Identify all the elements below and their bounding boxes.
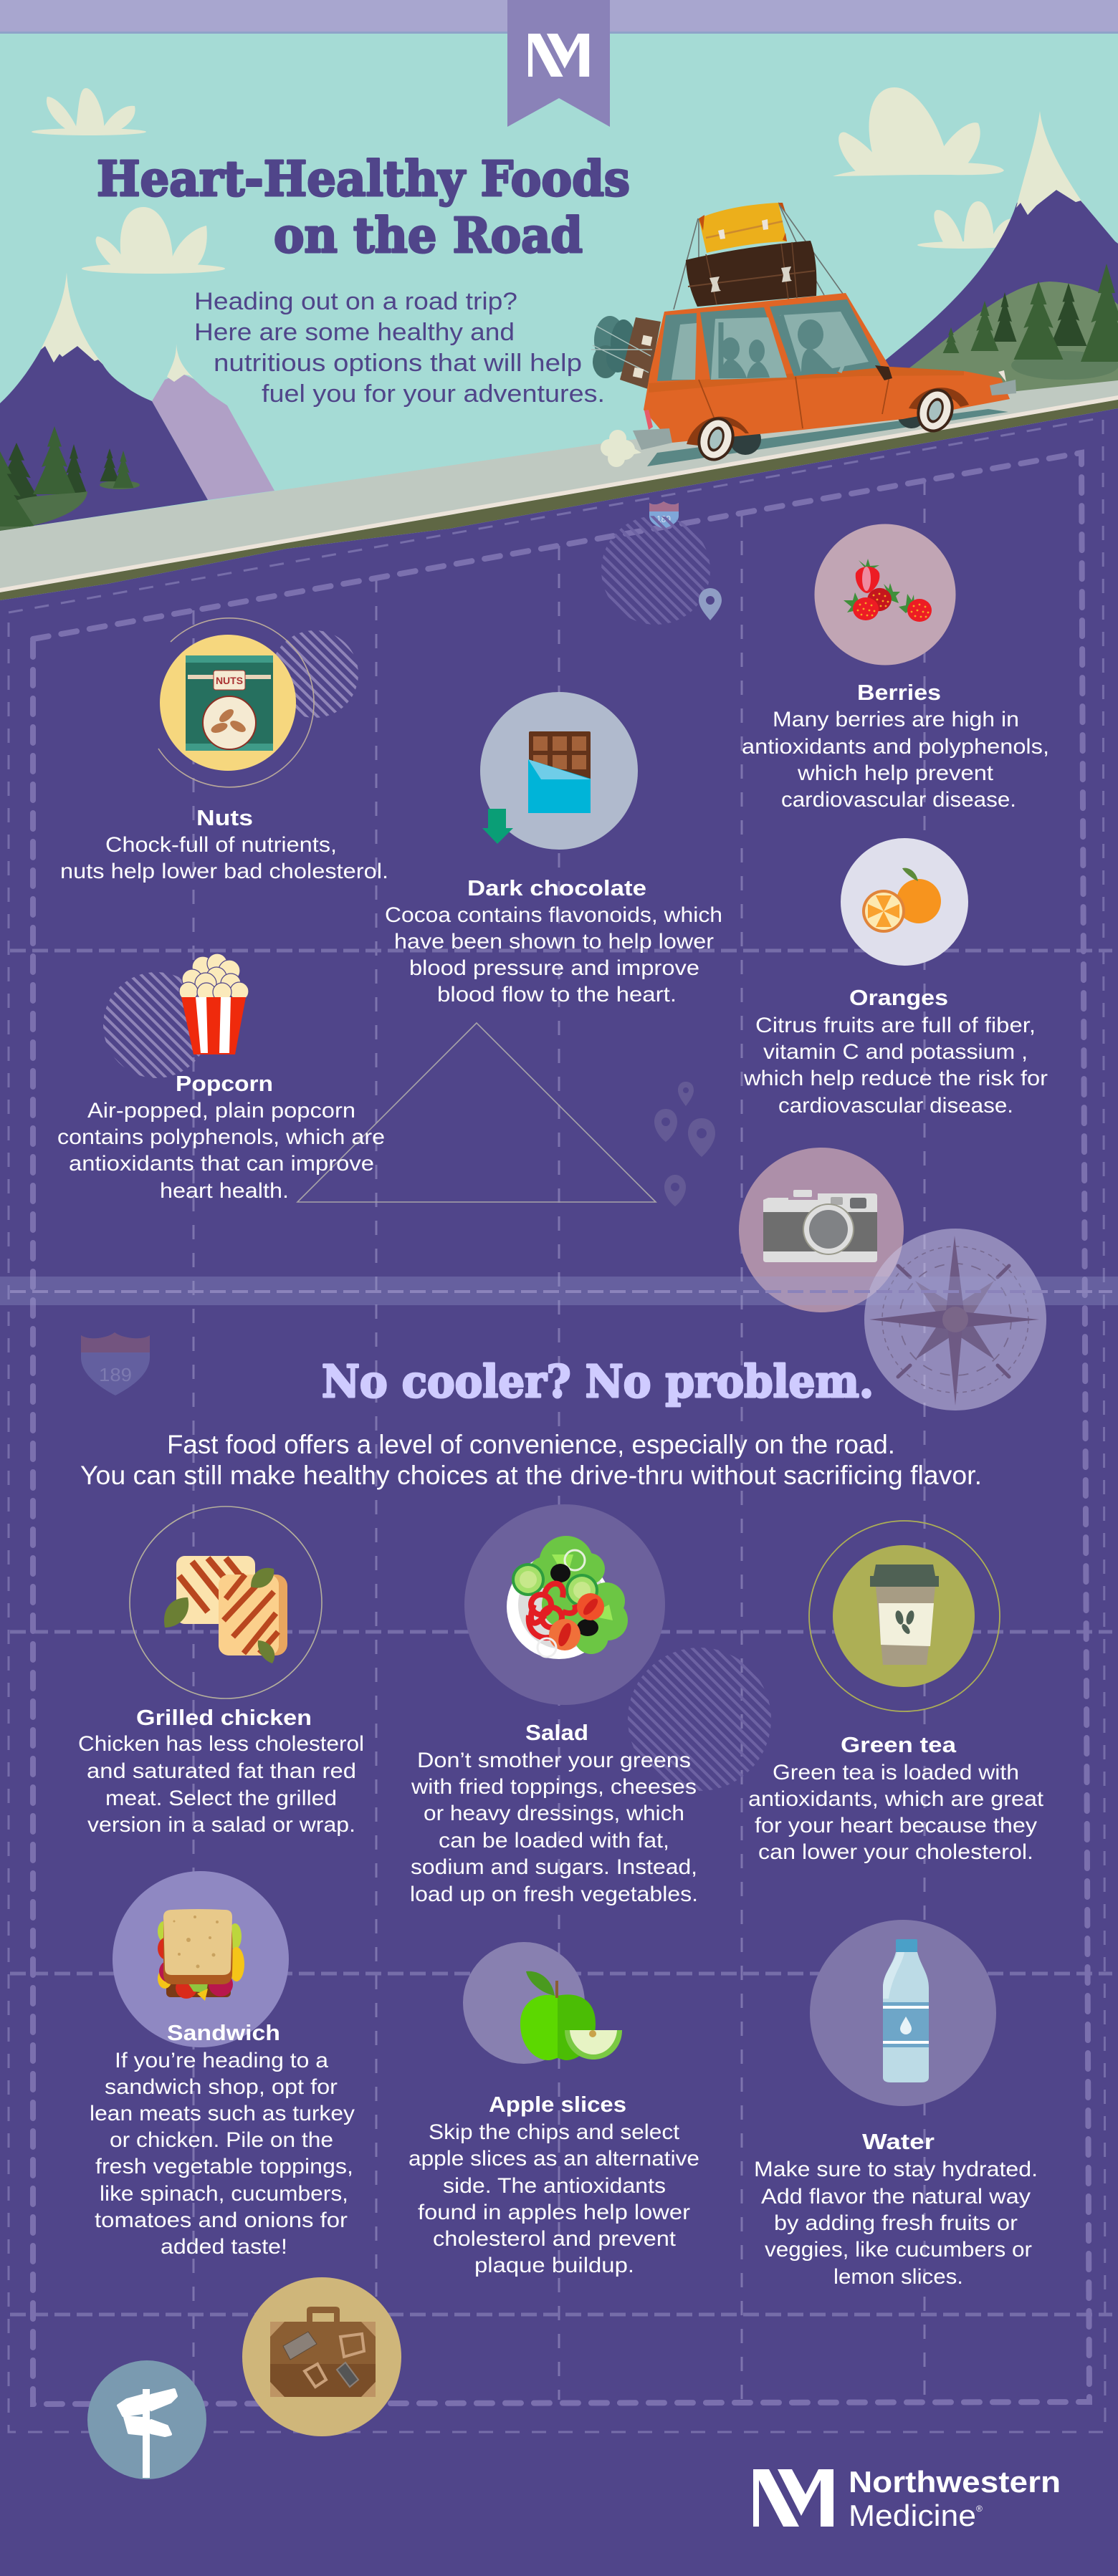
top band — [0, 0, 1118, 33]
body text: blood pressure and improve — [409, 956, 699, 980]
body text: sandwich shop, opt for — [105, 2075, 338, 2099]
heading: Water — [862, 2129, 935, 2154]
icon: wheel arches — [687, 388, 969, 446]
body text — [408, 2120, 699, 2277]
heading: Nuts — [196, 805, 253, 830]
icon: nuts bag — [186, 655, 273, 751]
icon: interstate sign top — [649, 501, 679, 529]
icon: salad plate — [507, 1536, 628, 1659]
intro text — [194, 288, 605, 408]
icon: passengers — [720, 319, 849, 378]
body text: added taste! — [161, 2235, 287, 2259]
icon: car body — [644, 293, 1010, 443]
body text: antioxidants, which are great — [748, 1787, 1044, 1811]
cloud: middle left — [82, 207, 225, 274]
icon: interstate sign top: 189 — [656, 514, 671, 524]
car illustration — [591, 203, 1016, 467]
heading: Grilled chicken — [136, 1705, 312, 1730]
body text: Many berries are high in — [773, 708, 1019, 731]
icon: strawberries — [844, 559, 932, 622]
body text: blood flow to the heart. — [437, 983, 677, 1006]
icon: faded map pins — [654, 1082, 715, 1206]
heading: Popcorn — [176, 1071, 273, 1096]
logo wordmark: ® — [976, 2504, 983, 2514]
body text: or chicken. Pile on the — [110, 2128, 333, 2152]
heading: Green tea — [841, 1732, 957, 1757]
circle — [814, 524, 956, 665]
icon: compass — [864, 1229, 1046, 1410]
body text — [410, 1749, 698, 1906]
body text: plaque buildup. — [474, 2254, 634, 2277]
mountains: left — [0, 272, 274, 531]
panel: berries — [742, 524, 1049, 812]
body text: with fried toppings, cheeses — [411, 1775, 697, 1799]
icon: chocolate bar — [528, 731, 591, 813]
icon: signpost circle — [87, 2360, 206, 2479]
icon: popcorn box — [179, 953, 249, 1054]
body text: lean meats such as turkey — [90, 2102, 355, 2125]
cloud: small right — [917, 201, 1013, 249]
panel: oranges — [743, 838, 1048, 1118]
body text: Chock-full of nutrients, — [105, 833, 337, 857]
icon: car tyres rear — [730, 400, 926, 455]
panel: sandwich — [90, 1871, 355, 2259]
icon: NM mark — [753, 2469, 833, 2527]
logo wordmark: Medicine — [849, 2499, 976, 2532]
mountains: right — [853, 111, 1118, 401]
cloud: top right — [833, 87, 1004, 176]
hero scene — [0, 0, 1118, 716]
icon: brown suitcase — [686, 241, 816, 307]
triangle outline — [297, 1023, 656, 1202]
icon: green arrow — [482, 809, 513, 844]
section heading: No cooler? No problem. — [322, 1355, 874, 1408]
body text: for your heart because they — [755, 1814, 1037, 1837]
body text: side. The antioxidants — [443, 2174, 666, 2198]
body text: can be loaded with fat, — [439, 1829, 669, 1852]
body text: which help prevent — [797, 761, 994, 785]
body text — [57, 1099, 385, 1203]
icon: exhaust puff — [601, 430, 641, 467]
heading: Sandwich — [167, 2020, 280, 2045]
title — [97, 150, 630, 264]
panel: nuts — [60, 618, 388, 883]
ring — [130, 1506, 322, 1698]
body text — [743, 1014, 1048, 1118]
body text — [742, 708, 1049, 812]
band dashes — [10, 1290, 1112, 1293]
circle — [810, 1920, 996, 2106]
body text: Add flavor the natural way — [761, 2185, 1031, 2209]
body text: heart health. — [160, 1179, 289, 1203]
body text: can lower your cholesterol. — [758, 1840, 1033, 1864]
heading: Berries — [857, 680, 941, 705]
body text: and saturated fat than red — [87, 1759, 356, 1783]
panel: popcorn — [57, 953, 385, 1203]
body text: like spinach, cucumbers, — [100, 2182, 348, 2206]
body text: Skip the chips and select — [429, 2120, 680, 2144]
icon: logo ribbon — [507, 0, 610, 127]
section intro — [80, 1430, 982, 1490]
body text: which help reduce the risk for — [743, 1067, 1048, 1090]
panel: salad — [410, 1504, 771, 1906]
icon: nuts bag: NUTS — [216, 675, 243, 686]
icon: bedroll and back bag — [591, 316, 661, 389]
icon: camera circle — [739, 1148, 904, 1312]
body text: contains polyphenols, which are — [57, 1125, 385, 1149]
cloud: top left — [32, 88, 146, 135]
icon: car windows — [657, 299, 882, 381]
icon: tea cup — [870, 1565, 939, 1665]
panel: apple slices — [408, 1942, 699, 2277]
icon: suitcase circle — [242, 2277, 401, 2436]
body text — [385, 903, 722, 1006]
body text: cardiovascular disease. — [778, 1094, 1013, 1118]
body text: If you’re heading to a — [115, 2049, 328, 2072]
panel: grilled chicken — [78, 1506, 364, 1837]
intro text: nutritious options that will help — [214, 350, 582, 377]
body text: vitamin C and potassium , — [763, 1040, 1028, 1064]
ring — [809, 1521, 1000, 1711]
panel: water — [754, 1920, 1038, 2289]
panel: dark chocolate — [385, 692, 722, 1006]
body text: load up on fresh vegetables. — [410, 1883, 698, 1906]
icon: grilled chicken — [164, 1556, 287, 1663]
road — [0, 380, 1118, 716]
body text: have been shown to help lower — [394, 930, 714, 953]
highlight band — [0, 1277, 1118, 1305]
icon: map pin — [699, 588, 722, 620]
circle — [464, 1504, 665, 1705]
icon: door seams — [699, 373, 890, 428]
icon: front wheel — [912, 384, 959, 437]
footer logo — [753, 2465, 1061, 2532]
icon: apple — [520, 1971, 622, 2060]
intro text: fuel you for your adventures. — [262, 380, 605, 408]
body text: Cocoa contains flavonoids, which — [385, 903, 722, 927]
intro text: Here are some healthy and — [194, 319, 515, 346]
body text: cholesterol and prevent — [433, 2227, 677, 2251]
body text — [90, 2049, 355, 2259]
body text: veggies, like cucumbers or — [765, 2238, 1032, 2262]
body text: by adding fresh fruits or — [774, 2211, 1018, 2235]
body text: Make sure to stay hydrated. — [754, 2158, 1038, 2181]
hatched circle top — [601, 516, 710, 625]
circle — [113, 1871, 289, 2047]
icon: rear wheel — [692, 413, 740, 466]
ring — [158, 618, 314, 787]
intro text: Heading out on a road trip? — [194, 288, 517, 315]
body text: cardiovascular disease. — [781, 788, 1016, 812]
nuts circle — [160, 635, 296, 771]
hatched circle — [271, 630, 358, 718]
body text: Green tea is loaded with — [773, 1761, 1019, 1784]
title: on the Road — [274, 207, 583, 264]
map grid dashes — [9, 418, 1112, 2432]
icon: oranges — [862, 868, 941, 933]
panel: green tea — [748, 1521, 1044, 1864]
body text: nuts help lower bad cholesterol. — [60, 860, 388, 883]
icon: interstate sign faded: 189 — [99, 1364, 132, 1385]
body text — [748, 1761, 1044, 1864]
logo wordmark: Northwestern — [849, 2465, 1061, 2499]
circle — [480, 692, 638, 850]
heading: Salad — [525, 1720, 588, 1745]
body text — [60, 833, 388, 883]
body text: or heavy dressings, which — [424, 1802, 684, 1825]
body text: Chicken has less cholesterol — [78, 1732, 364, 1756]
icon: interstate sign faded — [81, 1332, 150, 1395]
body text: antioxidants and polyphenols, — [742, 735, 1049, 759]
icon: roof ropes — [674, 203, 843, 309]
heading: Apple slices — [489, 2092, 626, 2117]
body text: antioxidants that can improve — [69, 1152, 374, 1176]
body text: Don’t smother your greens — [417, 1749, 691, 1772]
icon: yellow suitcase — [699, 203, 787, 253]
circle — [463, 1942, 585, 2064]
logo wordmark — [849, 2465, 1061, 2532]
circle — [833, 1545, 975, 1687]
hatched circle — [103, 972, 209, 1078]
icon: bumpers — [633, 370, 1016, 450]
title: Heart-Healthy Foods — [97, 150, 630, 207]
body text: fresh vegetable toppings, — [95, 2155, 353, 2178]
circle — [841, 838, 968, 966]
body text — [78, 1732, 364, 1837]
body text: sodium and sugars. Instead, — [411, 1855, 697, 1879]
section intro: Fast food offers a level of convenience, especially on the road. — [167, 1430, 895, 1459]
body text: tomatoes and onions for — [95, 2209, 348, 2232]
body text: lemon slices. — [833, 2265, 963, 2289]
section intro: You can still make healthy choices at the drive-thru without sacrificing flavor. — [80, 1461, 982, 1490]
body text: Citrus fruits are full of fiber, — [755, 1014, 1036, 1037]
body text: found in apples help lower — [418, 2201, 690, 2224]
body text: version in a salad or wrap. — [87, 1813, 355, 1837]
icon: water bottle — [883, 1939, 929, 2082]
hatched circle — [628, 1648, 771, 1791]
heading: Dark chocolate — [467, 875, 646, 900]
body text: Air-popped, plain popcorn — [87, 1099, 355, 1123]
body text: apple slices as an alternative — [408, 2147, 699, 2171]
heading: Oranges — [849, 985, 948, 1010]
body text — [754, 2158, 1038, 2289]
body text: meat. Select the grilled — [105, 1787, 337, 1810]
icon: sandwich — [158, 1909, 244, 2001]
